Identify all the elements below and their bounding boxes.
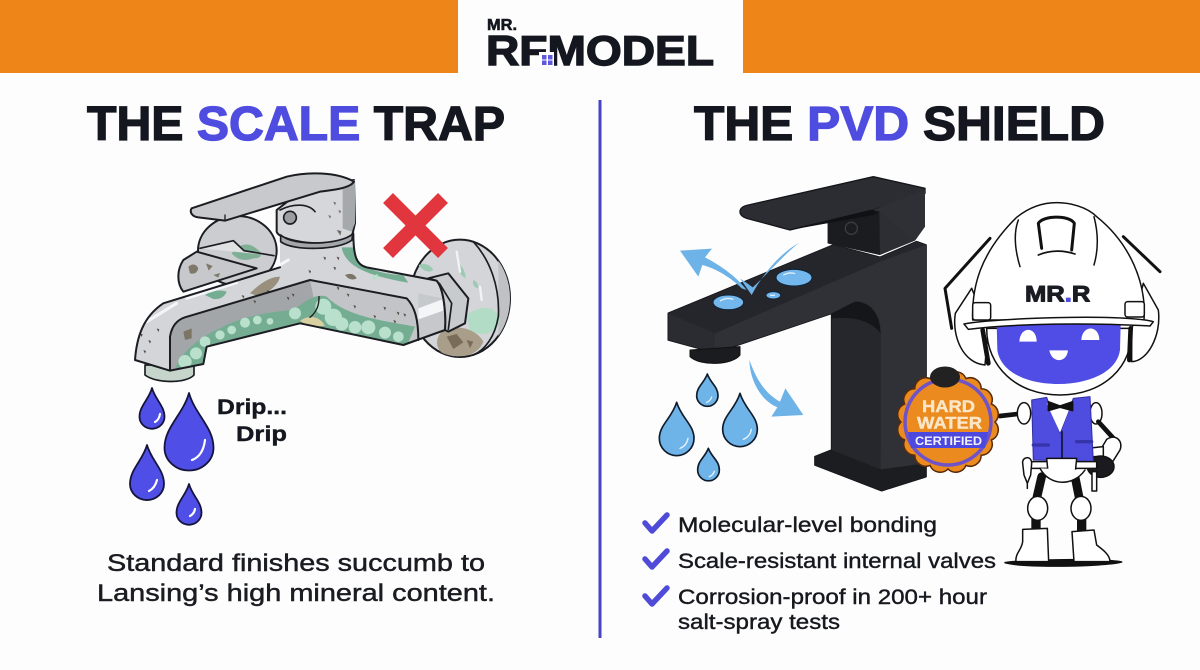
icon: checkmark swoosh: [740, 243, 799, 295]
robot tool belt: [1023, 458, 1097, 491]
badge: hard water certified: [898, 366, 998, 472]
icon: purple drips: [130, 388, 214, 525]
icon: water repel arrow up: [680, 249, 747, 290]
header band: [0, 0, 1200, 73]
robot mascot: [945, 203, 1160, 566]
icon: blue water drops: [659, 374, 757, 481]
badge: hard water certified: CERTIFIED: [915, 436, 982, 448]
label: drip drip: Drip: [236, 423, 287, 446]
text: standard finishes caption: [97, 550, 495, 607]
bullet: corrosion-proof: Corrosion-proof in 200+ hour: [678, 586, 987, 609]
text: standard finishes caption: Lansing’s high mineral content.: [97, 580, 495, 607]
bullet: corrosion-proof: salt-spray tests: [678, 611, 840, 634]
badge: hard water certified: HARD: [922, 398, 975, 416]
label: drip drip: [217, 396, 287, 446]
label: drip drip: Drip...: [217, 396, 287, 419]
icon: red x: [388, 198, 443, 253]
icon: black pvd faucet: [659, 177, 926, 491]
robot vest: [1032, 397, 1093, 462]
robot arms: [1000, 403, 1121, 477]
icon: water repel arrow down: [749, 360, 803, 417]
text: standard finishes caption: Standard finishes succumb to: [107, 550, 485, 577]
heading: the pvd shield: THE PVD SHIELD: [694, 98, 1105, 151]
bullet: scale-resistant valves: Scale-resistant internal valves: [678, 550, 996, 573]
badge: hard water certified: WATER: [917, 414, 982, 432]
icon: water beads on spout: [713, 269, 812, 310]
robot hard hat: MR.R: [1025, 282, 1090, 307]
bullet: corrosion-proof: [645, 586, 987, 634]
robot head: [955, 283, 1159, 395]
robot hard hat: [945, 203, 1160, 329]
divider: [598, 100, 602, 638]
icon: corroded faucet: [135, 173, 512, 382]
bullet: molecular-level bonding: Molecular-level bonding: [678, 514, 937, 537]
logo: RFMODEL: [486, 27, 714, 74]
robot legs and feet: [1005, 477, 1122, 566]
feature checklist: [645, 514, 996, 634]
logo: MR.: [487, 17, 517, 34]
heading: the scale trap: THE SCALE TRAP: [87, 98, 505, 151]
